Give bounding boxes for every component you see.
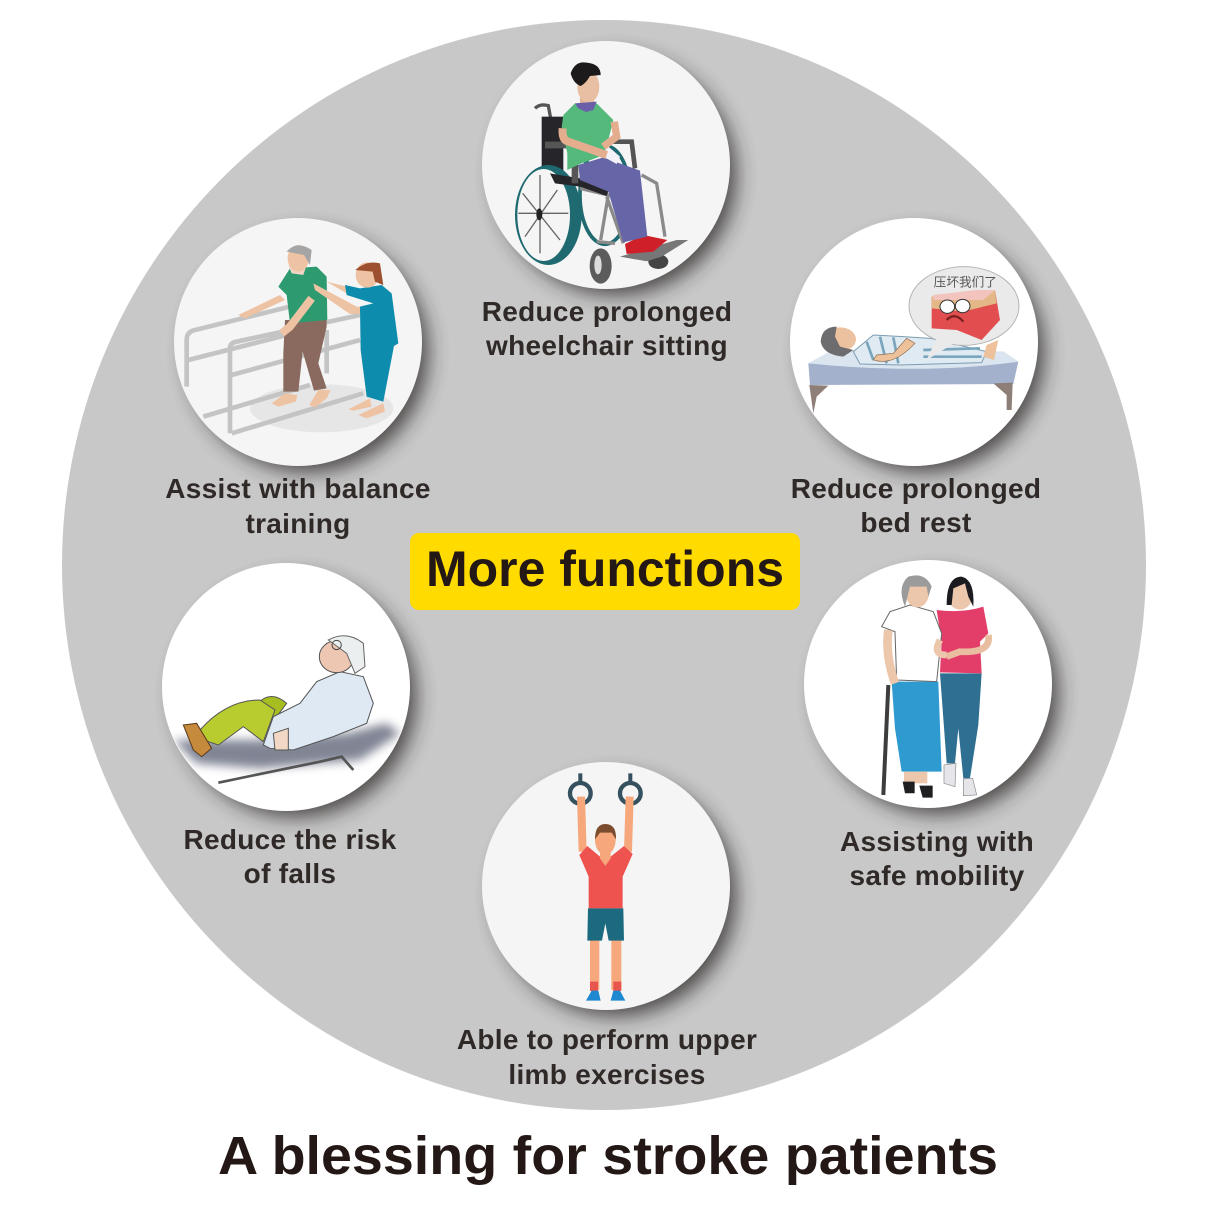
center callout: more functions (410, 533, 800, 610)
icon: elderly man fallen (173, 636, 400, 783)
label: upper limb exercises: limb exercises (508, 1059, 706, 1090)
panel: wheelchair (482, 41, 736, 295)
panel: falls (162, 563, 416, 817)
icon: patient on bed with speech bubble: 压坏我们了 (934, 276, 997, 290)
panel: safe mobility (804, 560, 1058, 814)
label: bed rest: Reduce prolonged (791, 473, 1041, 504)
title: A blessing for stroke patients (218, 1126, 998, 1186)
label: falls: of falls (244, 858, 336, 889)
icon: caregiver helping elder walk (882, 575, 989, 798)
label: bed rest: bed rest (860, 507, 972, 538)
label: upper limb exercises: Able to perform upper (457, 1024, 757, 1055)
icon: person on gymnastic rings (570, 773, 641, 1001)
label: safe mobility: Assisting with (840, 826, 1034, 857)
label: safe mobility: safe mobility (849, 860, 1025, 891)
label: balance training: Assist with balance (165, 473, 431, 504)
label: falls: Reduce the risk (183, 824, 397, 855)
label: wheelchair: Reduce prolonged (482, 296, 732, 327)
icon: person in wheelchair (515, 62, 688, 284)
center callout: more functions: More functions (426, 541, 784, 597)
icon: patient on bed with speech bubble (808, 267, 1019, 413)
panel: balance training (174, 218, 428, 472)
panel: bed rest (790, 218, 1044, 472)
icon: balance training with therapist (187, 245, 398, 433)
label: balance training: training (245, 508, 351, 539)
panel: upper limb exercises (482, 762, 736, 1016)
label: wheelchair: wheelchair sitting (485, 330, 728, 361)
